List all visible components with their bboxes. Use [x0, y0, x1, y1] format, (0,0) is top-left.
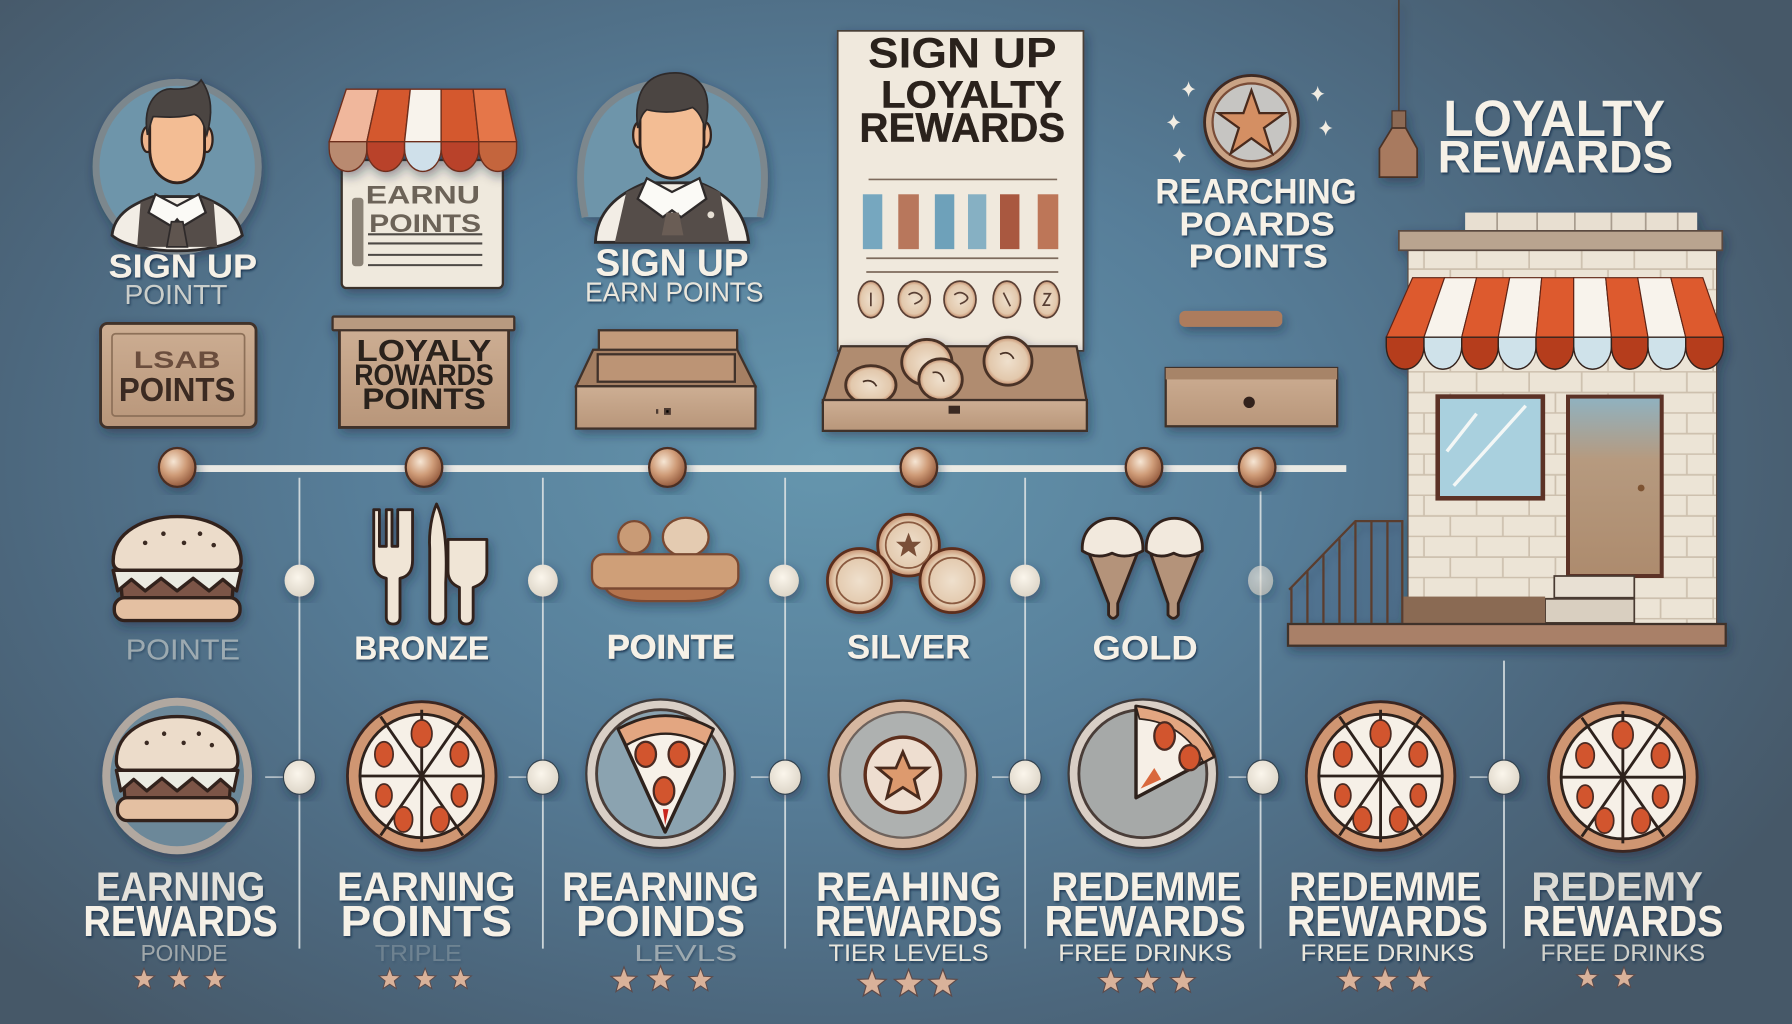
railing: [1289, 521, 1403, 623]
panel: reaching points: [1155, 75, 1357, 275]
icon: pizza slice plate: [586, 699, 735, 848]
icon: storefront: [1288, 213, 1726, 646]
icon: three coins: [827, 514, 984, 613]
steps: [1545, 576, 1634, 623]
label: points: POINTT: [125, 279, 228, 310]
poster subheading: LOYALTY: [881, 73, 1062, 115]
points card: [101, 323, 256, 427]
heading line two: REWARDS: [1045, 898, 1246, 946]
icon: pizza: [1306, 702, 1455, 850]
label: bronze: BRONZE: [354, 630, 489, 667]
label: sign up: SIGN UP: [595, 241, 749, 283]
heading: REAHING: [816, 864, 1001, 910]
heading line two: REWARDS: [1287, 898, 1488, 946]
points card: POINTS: [119, 372, 235, 409]
label: pointe: POINTE: [607, 628, 735, 666]
tier: silver: [827, 514, 984, 666]
heading: EARNING: [96, 864, 265, 910]
heading line two: REWARDS: [1522, 898, 1723, 946]
tier: burger: [113, 517, 241, 666]
panel: sign up customer: [96, 80, 258, 310]
sub label: LEVLS: [634, 940, 737, 966]
tier: points: [592, 518, 738, 666]
lower row connectors: [265, 776, 1504, 778]
panel: sign up poster: [823, 29, 1087, 431]
column 5: redeem rewards: [1045, 699, 1246, 992]
heading line two: POARDS: [1179, 206, 1335, 243]
sign: earn points: EARNU: [366, 181, 480, 209]
bar chart: [863, 194, 1058, 249]
icon: staff avatar: [581, 73, 764, 242]
column 2: earning points: [337, 702, 515, 989]
label: silver: SILVER: [847, 628, 971, 666]
shelf and drawer: [1166, 311, 1337, 426]
sparkles: [1167, 81, 1333, 163]
icon: star plate: [829, 701, 977, 849]
poster subheading two: REWARDS: [859, 105, 1065, 151]
icon: burger plate: [106, 702, 248, 850]
icon: small awning: [329, 89, 517, 171]
sub label: FREE DRINKS: [1301, 940, 1474, 967]
connector lines: [299, 478, 1504, 949]
timeline: [159, 448, 1520, 949]
heading: REDEMME: [1051, 864, 1241, 910]
label: pointe faded: POINTE: [126, 634, 240, 666]
icon: ice cream cones: [1082, 518, 1202, 618]
upper row nodes: [285, 565, 1273, 597]
poster sheet: [838, 29, 1083, 351]
icon: cutlery: [374, 504, 487, 624]
stars: [1577, 967, 1635, 988]
sign: earn points: POINTS: [369, 210, 481, 238]
platform: [1288, 624, 1726, 646]
sub label: TIER LEVELS: [829, 940, 989, 967]
sub label: FREE DRINKS: [1058, 940, 1232, 967]
stars: [1337, 967, 1432, 991]
label: gold: GOLD: [1093, 629, 1198, 667]
column 4: reaching rewards: [815, 701, 1002, 996]
column 3: rearning points: [562, 699, 759, 992]
heading: REDEMME: [1289, 864, 1481, 910]
loyalty rewards points box: LOYALY: [357, 333, 492, 368]
sign: earn points: [342, 160, 503, 288]
stars: [133, 968, 226, 989]
heading line two: REWARDS: [815, 898, 1002, 946]
icon: pizza: [1549, 703, 1697, 851]
title: REWARDS: [1438, 132, 1673, 183]
hanging lamp: [1379, 0, 1417, 177]
heading: REARNING: [562, 864, 759, 910]
icon: burger: [113, 517, 241, 621]
column 7: redeem rewards: [1522, 703, 1723, 988]
panel: second customer: [581, 73, 764, 308]
window: [1438, 397, 1543, 498]
loyalty rewards points box: ROWARDS: [354, 359, 494, 392]
poster heading: SIGN UP: [868, 29, 1057, 76]
title: LOYALTY: [1443, 89, 1665, 147]
stars: [1098, 969, 1195, 992]
column 6: redeem rewards: [1287, 702, 1488, 991]
heading line two: POINTS: [341, 898, 512, 946]
door: [1568, 397, 1662, 576]
heading line two: REWARDS: [83, 898, 278, 946]
icon: plate with slice: [1069, 699, 1217, 848]
stars: [611, 966, 713, 992]
sub label: POINDE: [141, 940, 227, 966]
heading: REDEMY: [1531, 864, 1703, 910]
tray of coins: [823, 337, 1087, 431]
label: earn points: EARN POINTS: [585, 277, 763, 308]
title: [1438, 89, 1673, 183]
sub label: TRIPLE: [375, 940, 462, 966]
loyalty rewards points box: [333, 317, 514, 427]
tier: gold: [1082, 518, 1202, 667]
stars: [858, 969, 957, 996]
sub label: FREE DRINKS: [1541, 940, 1705, 967]
panel: store earn points sign: [329, 89, 517, 288]
icon: star medal: [1205, 75, 1298, 169]
horizontal bar: [177, 466, 1346, 472]
label: sign up: SIGN UP: [109, 249, 257, 286]
heading line two: POINDS: [576, 898, 745, 946]
awning: [1386, 278, 1723, 369]
heading: reaching points: REARCHING: [1155, 171, 1357, 211]
heading line three: POINTS: [1189, 238, 1328, 275]
icon: pizza: [347, 702, 496, 850]
lower row nodes: [283, 760, 1520, 794]
milestone knobs: [159, 448, 1275, 487]
points card: LSAB: [134, 347, 221, 374]
open box: [576, 330, 755, 429]
loyalty rewards points box: POINTS: [362, 383, 486, 416]
icon: customer avatar: [96, 80, 258, 251]
stars: [379, 968, 471, 989]
coin row: [858, 281, 1059, 318]
icon: coins on tray: [592, 518, 738, 601]
tier: bronze: [354, 504, 489, 667]
column 1: earning rewards: [83, 702, 278, 989]
heading: EARNING: [337, 864, 515, 910]
